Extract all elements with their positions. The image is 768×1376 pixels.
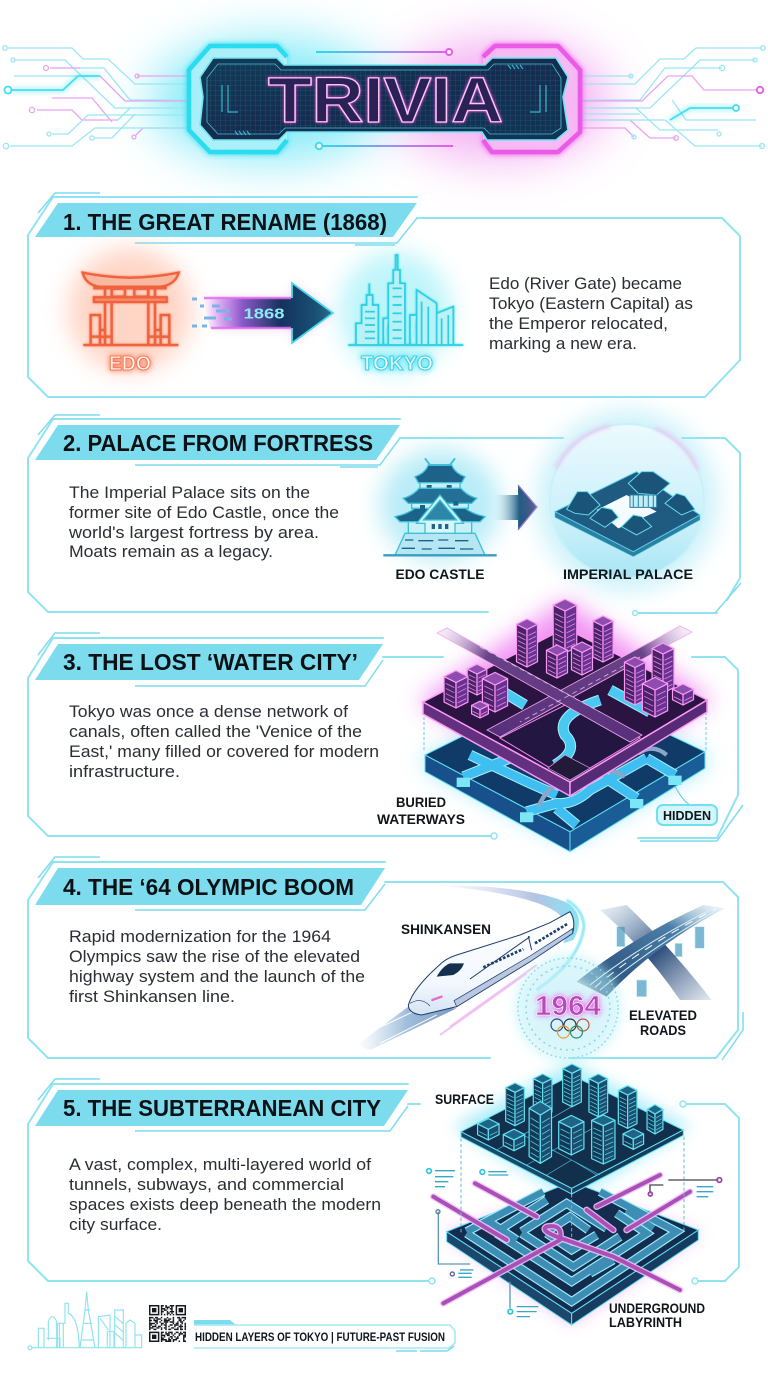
dark plate xyxy=(200,58,568,140)
arrow 1868 xyxy=(192,283,333,343)
circuit traces right xyxy=(582,46,765,149)
illustration: layered water city xyxy=(377,599,717,852)
label Buried Waterways: WATERWAYS xyxy=(377,811,465,827)
header xyxy=(35,868,385,905)
panel 5: the subterranean city xyxy=(28,1063,739,1330)
footer banner xyxy=(194,1320,455,1351)
icon: Imperial Palace in sphere xyxy=(537,411,717,591)
text block xyxy=(69,928,365,1006)
lower waterway slab xyxy=(425,685,705,852)
frame accents xyxy=(38,415,741,613)
frame accents xyxy=(38,193,417,245)
text block xyxy=(69,703,379,781)
label Elevated Roads: ELEVATED xyxy=(629,1007,697,1023)
circuit traces left xyxy=(3,46,188,149)
text block: Tokyo (Eastern Capital) as xyxy=(489,295,693,313)
annotation callouts xyxy=(427,1169,722,1317)
text block: Tokyo was once a dense network of xyxy=(69,703,348,721)
header xyxy=(35,425,400,460)
arrow xyxy=(493,485,537,530)
surface buildings xyxy=(478,1064,663,1164)
frame accents xyxy=(38,857,743,1060)
label Underground Labyrinth: UNDERGROUND xyxy=(609,1300,705,1316)
icon: torii gate EDO xyxy=(68,248,192,375)
text block: spaces exists deep beneath the modern xyxy=(69,1196,381,1214)
label Underground Labyrinth: LABYRINTH xyxy=(609,1314,682,1330)
text block: first Shinkansen line. xyxy=(69,988,235,1006)
label Surface: SURFACE xyxy=(435,1091,494,1107)
magenta tunnels xyxy=(433,1175,690,1303)
label Imperial Palace: IMPERIAL PALACE xyxy=(563,566,693,582)
text block: Rapid modernization for the 1964 xyxy=(69,928,331,946)
olympic rings xyxy=(551,1019,589,1038)
text block: world's largest fortress by area. xyxy=(68,524,319,542)
heading text: 1. THE GREAT RENAME (1868) xyxy=(63,209,387,235)
panel frame xyxy=(28,638,738,838)
arrow label: 1868 xyxy=(244,306,284,322)
text block: Olympics saw the rise of the elevated xyxy=(69,948,360,966)
label Buried Waterways xyxy=(377,794,465,827)
text block xyxy=(68,484,339,561)
text block: The Imperial Palace sits on the xyxy=(69,484,310,502)
text block: former site of Edo Castle, once the xyxy=(69,504,339,522)
title banner xyxy=(3,38,765,162)
QR code xyxy=(149,1305,186,1342)
upper city slab xyxy=(423,628,707,796)
text block: canals, often called the 'Venice of the xyxy=(69,723,362,741)
plate grid texture xyxy=(207,64,561,134)
label Buried Waterways: BURIED xyxy=(396,794,446,810)
text block: Moats remain as a legacy. xyxy=(69,543,273,561)
icon: Tokyo skyline xyxy=(339,252,463,375)
heading text: 5. THE SUBTERRANEAN CITY xyxy=(63,1095,381,1121)
heading text: 2. PALACE FROM FORTRESS xyxy=(63,430,373,456)
frame accents xyxy=(38,633,743,841)
glow xyxy=(418,600,712,790)
panel 1: the great rename xyxy=(28,193,740,397)
text block xyxy=(69,1156,381,1234)
footer xyxy=(28,1292,455,1351)
labyrinth slab xyxy=(447,1182,698,1325)
footer skyline xyxy=(28,1292,142,1350)
text block: infrastructure. xyxy=(69,763,180,781)
icon: Edo Castle xyxy=(380,449,500,582)
text block xyxy=(489,275,693,353)
year: 1964 xyxy=(535,990,601,1021)
text block: Edo (River Gate) became xyxy=(489,275,682,293)
badge 1964 xyxy=(514,954,622,1062)
text block: the Emperor relocated, xyxy=(489,315,668,333)
callout: Hidden xyxy=(657,786,717,825)
header xyxy=(35,203,417,237)
text block: East,' many filled or covered for modern xyxy=(69,743,379,761)
label Edo Castle: EDO CASTLE xyxy=(396,566,484,582)
panel 3: the lost water city xyxy=(28,599,743,852)
train xyxy=(408,912,574,1015)
surface slab xyxy=(461,1075,683,1194)
illustration: surface and labyrinth xyxy=(427,1063,722,1330)
top and bottom connector lines xyxy=(316,49,453,149)
dashed connectors xyxy=(461,1137,684,1240)
label EDO: EDO xyxy=(109,353,151,375)
footer text: HIDDEN LAYERS OF TOKYO | FUTURE-PAST FUSION xyxy=(195,1330,445,1344)
plate details xyxy=(222,65,546,135)
heading text: 3. THE LOST ‘WATER CITY’ xyxy=(63,649,358,675)
illustration: Shinkansen and highways xyxy=(357,885,725,1062)
callout: Hidden: HIDDEN xyxy=(663,809,711,823)
elevated roads xyxy=(577,905,725,1000)
swoosh and rails xyxy=(357,885,584,1050)
connector dashes xyxy=(424,712,706,752)
frame magenta xyxy=(483,46,580,152)
panel frame xyxy=(28,419,740,613)
label Shinkansen: SHINKANSEN xyxy=(401,921,491,937)
label Elevated Roads: ROADS xyxy=(640,1022,686,1038)
text block: A vast, complex, multi-layered world of xyxy=(69,1156,371,1174)
panel 2: palace from fortress xyxy=(28,411,741,616)
label TOKYO: TOKYO xyxy=(361,353,433,375)
header xyxy=(35,1090,408,1126)
panel frame xyxy=(28,1084,739,1281)
frame accents xyxy=(38,1079,408,1131)
text block: city surface. xyxy=(69,1216,162,1234)
frame cyan xyxy=(189,46,287,152)
heading text: 4. THE ‘64 OLYMPIC BOOM xyxy=(63,874,354,900)
label Elevated Roads xyxy=(629,1007,697,1038)
text block: highway system and the launch of the xyxy=(69,968,365,986)
glow xyxy=(453,1063,690,1200)
label Underground Labyrinth xyxy=(609,1300,705,1330)
panel frame xyxy=(28,197,740,397)
roads xyxy=(437,626,692,742)
maze walls xyxy=(467,1192,677,1302)
text block: tunnels, subways, and commercial xyxy=(69,1176,344,1194)
header xyxy=(35,644,383,680)
heading: TRIVIA: TRIVIA xyxy=(268,64,503,136)
text block: marking a new era. xyxy=(489,335,637,353)
panel frame xyxy=(28,862,738,1058)
panel 4: the 64 olympic boom xyxy=(28,857,743,1062)
buildings xyxy=(444,599,694,718)
